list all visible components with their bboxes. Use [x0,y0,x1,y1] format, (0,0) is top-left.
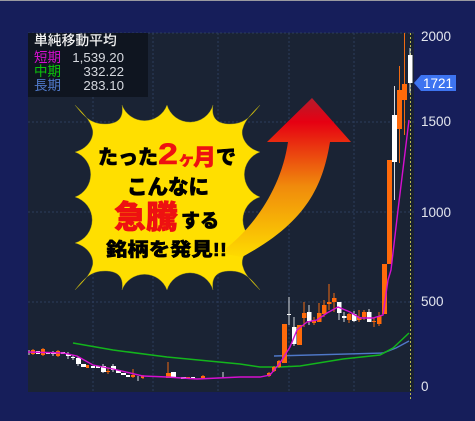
headline text: こんなに [127,176,209,199]
moving average: short term [28,120,409,379]
legend: moving averages [28,29,148,97]
legend: moving averages: 332.22 [83,64,124,79]
y axis labels: 500 [421,294,444,309]
moving average: middle term [73,333,409,367]
current price tag: 1721 [423,76,453,91]
headline text: 急騰 [114,199,178,235]
candlesticks [29,33,412,381]
headline text: で [216,147,236,169]
legend: moving averages: 中期 [34,60,61,80]
legend: moving averages: 単純移動平均 [34,29,117,49]
headline text: 銘柄を発見!! [106,239,227,260]
rising arrow [220,98,351,257]
headline text: たった [98,146,158,169]
headline text: ヶ [178,150,195,169]
y axis labels: 0 [421,379,429,394]
chart panel [28,33,414,401]
current price tag [414,75,456,91]
y axis labels: 1000 [421,205,451,220]
legend: moving averages: 長期 [34,74,61,94]
legend: moving averages: 短期 [34,46,61,66]
y axis labels: 2000 [421,29,451,44]
burst callout [75,105,260,290]
moving average: long term [274,341,409,356]
headline text: 月 [193,144,216,170]
headline text: する [181,210,219,232]
legend: moving averages: 1,539.20 [72,50,124,65]
headline text [98,138,236,260]
headline text: 2 [158,138,178,171]
y axis labels [421,29,451,394]
y axis labels: 1500 [421,114,451,129]
legend: moving averages: 283.10 [83,78,124,93]
